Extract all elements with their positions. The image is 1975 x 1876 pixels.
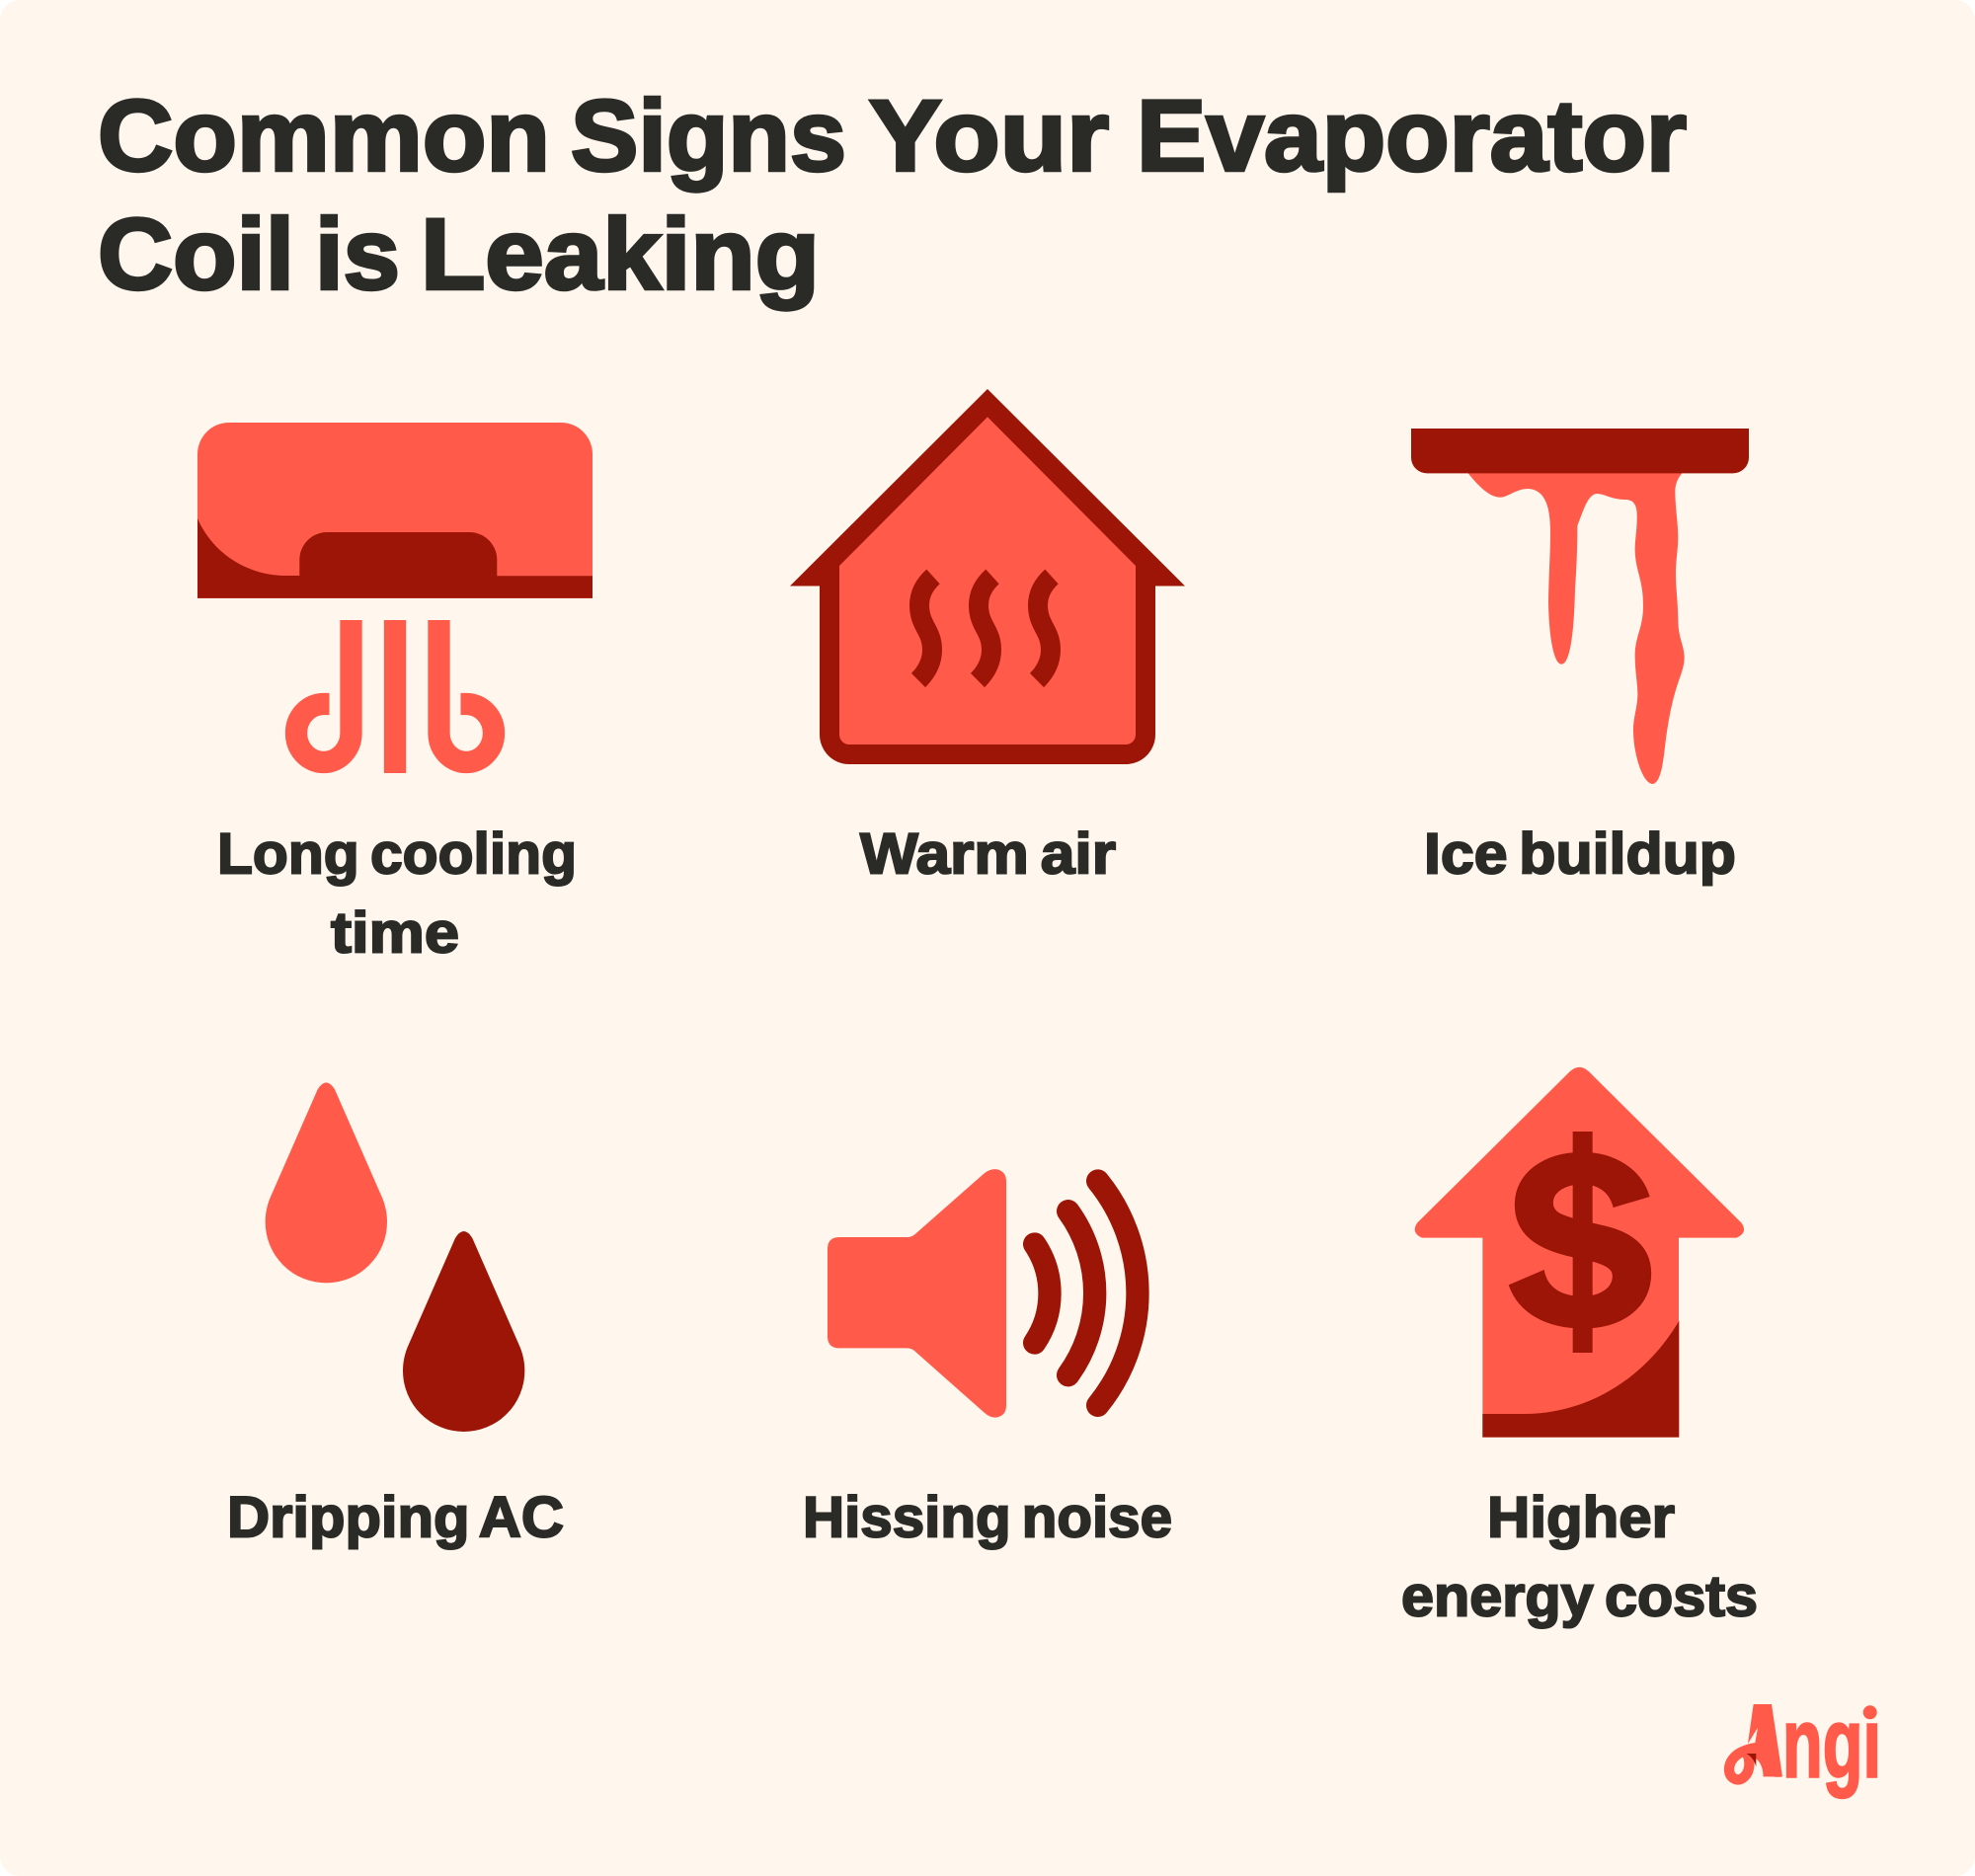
panel: long cooling time — [198, 423, 592, 966]
label: higher energy costs: Higher — [1487, 1485, 1675, 1550]
label: warm air: Warm air — [860, 821, 1116, 887]
panel: hissing noise — [803, 1169, 1172, 1550]
icon: air conditioner — [198, 423, 592, 773]
label: long cooling time: time — [331, 900, 459, 966]
title: Coil — [98, 197, 294, 310]
logo: Angi: ngi — [1782, 1688, 1881, 1799]
title — [98, 79, 1687, 310]
title: Common — [98, 79, 550, 192]
icon: two water drops — [266, 1082, 524, 1432]
logo: Angi — [1729, 1687, 1881, 1799]
panel: warm air — [790, 389, 1185, 887]
panel: higher energy costs — [1401, 1067, 1758, 1629]
title: is — [315, 197, 400, 310]
icon: house with heat waves — [790, 389, 1185, 764]
icon: speaker with sound waves — [828, 1169, 1138, 1418]
title: Your — [869, 79, 1109, 192]
label: higher energy costs: energy costs — [1401, 1564, 1758, 1629]
label: higher energy costs — [1401, 1485, 1758, 1629]
logo: Angi: A — [1748, 1687, 1782, 1798]
title: Evaporator — [1137, 79, 1687, 192]
panel: dripping AC — [227, 1082, 564, 1550]
label: long cooling time — [217, 821, 577, 966]
panel: ice buildup — [1411, 429, 1749, 887]
label: ice buildup: Ice buildup — [1424, 821, 1736, 887]
title: Signs — [571, 79, 846, 192]
label: long cooling time: Long cooling — [217, 821, 577, 887]
title: Leaking — [421, 197, 820, 310]
label: dripping AC: Dripping AC — [227, 1485, 564, 1550]
icon: icicles under a ledge — [1411, 429, 1749, 784]
icon: up arrow with dollar sign — [1415, 1067, 1744, 1438]
label: hissing noise: Hissing noise — [803, 1485, 1172, 1550]
